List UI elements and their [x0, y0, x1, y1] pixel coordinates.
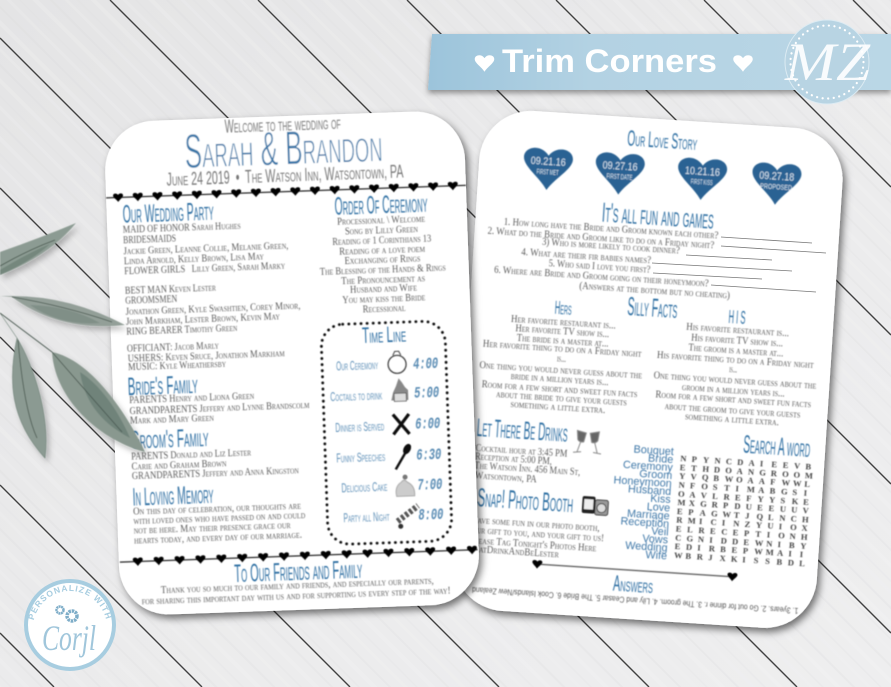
text block: order of ceremony: Exchanging of Rings — [344, 253, 421, 267]
word list: Wedding — [625, 540, 668, 554]
text block: order of ceremony: The Pronouncement as — [341, 273, 425, 287]
row: dinner — [335, 413, 441, 437]
text block: thank you: for sharing this important day with us and for supporting us every step of the way! — [142, 586, 451, 607]
text block: wedding party: Linda Arnold, Kelly Brown, Lisa May — [124, 251, 264, 267]
word list: Veil — [651, 525, 669, 538]
heart: first kiss: FIRST KISS — [690, 177, 713, 187]
icon: phone and camera — [582, 496, 609, 516]
text block: wedding party: BEST MAN Keven Lester — [125, 283, 216, 297]
text block: his facts: Room for a few short and sweet fun facts — [655, 389, 812, 410]
text block: in loving memory: On this day of celebration, our thoughts are — [133, 501, 301, 518]
word list: Vows — [642, 533, 669, 546]
panel: back of program (right card): Silly Facts — [627, 291, 678, 324]
text block: wedding party — [123, 219, 303, 373]
word search grid: ETHDOANGROOM — [679, 462, 813, 481]
text block: wedding party: John Markham, Lester Brown, Kevin May — [126, 311, 280, 328]
text block: hers facts — [477, 312, 646, 418]
leaf: lower right — [0, 313, 145, 452]
word list: Bride — [648, 453, 674, 466]
upside-down answers: 1. 3years. 2. Go out for dinne r. 3. The groom. 4. Lily and Ceasar 5. The Bride 6. Cook Islands/New Zealand — [472, 585, 799, 615]
word list: Ceremony — [623, 459, 674, 474]
word search grid: NFOSTIMABGSI — [678, 480, 808, 498]
text block: thank you: Thank you so much to our family and friends, and especially our parents, — [161, 576, 434, 596]
panel: back of program (right card): Oh Snap! Photo Booth — [459, 481, 574, 518]
row: cocktails: 5:00 — [414, 384, 440, 403]
text block: wedding party: GROOMSMEN — [125, 294, 177, 307]
panel: back of program (right card): Let There Be Drinks — [476, 414, 569, 448]
panel: time line — [321, 320, 452, 545]
text block: his facts: is... — [729, 364, 738, 376]
panel: back of program (right card) — [450, 108, 846, 631]
row: cake: Delicious Cake — [341, 479, 388, 495]
panel: front of program (left card): Groom's Family — [130, 424, 209, 455]
word list: Marriage — [627, 508, 670, 522]
text block: bride's family — [129, 389, 311, 427]
text block: his facts: groom in a million years is... — [682, 382, 785, 400]
panel: back of program (right card): H I S — [728, 307, 746, 328]
text block: wedding party: USHERS: Keven Sruce, Jonathon Markham — [128, 348, 286, 365]
word search grid: OAVLREFYYSKE — [678, 488, 810, 507]
text block: photo booth details: Please Tag Tonight's Photos Here — [469, 535, 597, 554]
leaf: lower left — [0, 313, 46, 458]
heart: first met: 09.21.16 — [530, 155, 566, 169]
title: couple names: Sarah & Brandon — [184, 119, 383, 179]
text block: in loving memory: with loved ones who have passed on and could — [133, 510, 306, 527]
heart: proposed — [750, 162, 802, 206]
word search grid: MXGRPDUEEUUV — [677, 497, 810, 516]
word list: Honeymoon — [613, 475, 672, 490]
word search grid: YVQBWOAAFWWL — [679, 471, 811, 489]
row: dinner: 6:00 — [415, 415, 441, 434]
text block: hers facts: The bride is a master at... — [516, 333, 609, 350]
row: speeches: Funny Speeches — [336, 449, 386, 466]
text block: hers facts: about the bride to give your guests — [496, 389, 627, 409]
text block: drinks details: Watsontown, PA — [474, 470, 538, 485]
heart: first date: FIRST DATE — [606, 171, 633, 182]
word list: Kiss — [650, 493, 672, 506]
leaf: middle — [0, 296, 125, 326]
icon: gears — [56, 606, 77, 621]
text block: photo booth details: Our gift to you, and your gift to us! — [470, 525, 604, 544]
text block: his facts — [651, 320, 820, 431]
word list: Groom — [639, 468, 673, 482]
text block: order of ceremony: The Blessing of the Hands & Rings — [320, 263, 446, 278]
text block: order of ceremony: Processional \ Welcome — [337, 214, 425, 228]
word list — [609, 442, 675, 563]
heart divider: bottom — [120, 546, 478, 567]
heart: first kiss — [676, 157, 728, 202]
game questions: 5. Who said I love you first? — [548, 258, 651, 276]
row: our ceremony: Our Ceremony — [336, 357, 378, 373]
text block: groom's family: PARENTS Donald and Liz Lester — [131, 447, 252, 463]
panel: front of program (left card) — [103, 109, 481, 616]
date and venue: June 24 2019 • The Watson Inn, Watsontown, PA — [166, 162, 404, 190]
text block: order of ceremony: You may kiss the Bride — [342, 292, 425, 306]
heart: first met: FIRST MET — [536, 167, 559, 177]
text block: hers facts: something a little extra. — [510, 399, 606, 416]
word search grid: NPYNCDAIEEVB — [680, 453, 812, 472]
text block: his facts: His favorite TV show is... — [691, 333, 783, 350]
game questions: 1. How long have the Bride and Groom known each other? — [503, 217, 719, 242]
game questions: (Answers at the bottom but no cheating) — [579, 281, 730, 301]
panel: back of program (right card): It's all fun and games — [601, 197, 715, 235]
panel: front of program (left card): In Loving Memory — [132, 481, 214, 512]
text block: his facts: something a little extra. — [685, 411, 779, 428]
word search grid: EDIRBEPWMAII — [674, 541, 804, 560]
word list: Bouquet — [633, 444, 674, 458]
text block: order of ceremony: Reading of a love poem — [339, 244, 426, 258]
panel: back of program (right card): Hers — [554, 298, 573, 319]
text block: wedding party: RING BEARER Timothy Green — [126, 323, 237, 338]
text block: hers facts: Her favorite TV show is... — [515, 323, 610, 340]
text block: order of ceremony: Recessional — [363, 303, 406, 315]
text block: bride's family: GRANDPARENTS Jeffery and Lynne Brandscolm — [129, 400, 310, 417]
arc text: PERSONALIZE WITH — [28, 585, 112, 620]
underlines: answer blanks — [652, 237, 826, 292]
row: our ceremony: 4:00 — [413, 355, 439, 374]
decorative leaves — [0, 223, 145, 458]
row: dinner: Dinner is Served — [335, 418, 385, 435]
banner: Trim Corners — [428, 20, 891, 104]
text block: groom's family: GRANDPARENTS Jeffery and Anna Kingston — [132, 465, 299, 482]
heart divider: top — [106, 181, 466, 202]
text block: thank you — [141, 575, 451, 607]
row: party: Party all Night — [343, 509, 390, 525]
text block: order of ceremony: Husband and Wife — [350, 283, 417, 296]
text block: groom's family — [131, 446, 299, 482]
word search grid: WBRJXKISSBDL — [674, 550, 806, 568]
panel: front of program (left card): Our Wedding Party — [122, 198, 214, 229]
heart divider — [532, 560, 738, 582]
game questions: 4. What are their fir babies names? — [521, 247, 652, 266]
text block: wedding party: MAID OF HONOR Sarah Hughes — [123, 221, 241, 236]
row: cocktails: Coctails to drink — [330, 387, 382, 404]
row: cake: 7:00 — [417, 476, 443, 495]
icon: right heart — [733, 55, 753, 72]
text block: drinks details: Reception at 5:00 PM, — [475, 451, 552, 467]
text block: hers facts: One thing you would never guess about the — [479, 360, 642, 381]
panel: front of program (left card): To Our Friends and Family — [234, 556, 363, 588]
word list: Love — [646, 501, 670, 514]
text block: drinks details: The Watson Inn. 456 Main St, — [474, 460, 581, 478]
text block: in loving memory: hearts today, and every day of our marriage. — [134, 530, 302, 547]
text block: groom's family: Carie and Graham Brown — [131, 458, 227, 473]
icon: left heart — [475, 55, 494, 72]
text block: his facts: The groom is a master at... — [688, 342, 784, 360]
panel: front of program (left card): Bride's Family — [127, 371, 198, 401]
text block: wedding party: OFFICIANT: Jacob Marly — [127, 341, 219, 355]
text block: photo booth details: Have some fun in our photo booth, — [471, 515, 600, 534]
panel: front of program (left card): Order Of Ceremony — [334, 190, 428, 221]
row: our ceremony — [336, 350, 439, 376]
leaf: upper — [0, 223, 76, 275]
game questions: 6. Where are Bride and Groom going on their honeymoon? — [494, 265, 710, 290]
heading: Answers: Answers — [612, 571, 654, 598]
text block: hers facts: Her favorite restaurant is... — [511, 314, 616, 332]
banner text: Trim Corners — [502, 43, 717, 79]
text block: hers facts: bride in a million years is... — [510, 371, 609, 388]
text block: bride's family: PARENTS Henry and Liona Green — [129, 391, 254, 406]
heading: Time Line: Time Line — [362, 322, 406, 348]
text block: wedding party: MUSIC: Kyle Wheathersby — [128, 359, 226, 373]
panel: back of program (right card): Our Love Story — [627, 126, 698, 155]
word search grid: CGNIDDEWNIBY — [675, 532, 807, 551]
logo word: Corjl — [42, 618, 96, 658]
text block: wedding party: BRIDESMAIDS — [123, 233, 176, 246]
text block: photo booth details — [469, 515, 605, 563]
badge: personalize with Corjl — [24, 579, 116, 671]
text block: hers facts: Her favorite thing to do on a Friday night — [482, 339, 642, 360]
text block: photo booth details: #EatDrinkAndBeLester — [469, 544, 560, 561]
row: party — [343, 505, 444, 531]
heart: first met — [522, 147, 574, 192]
text block: bride's family: Mark and Mary Green — [130, 413, 214, 427]
heart: first kiss: 10.21.16 — [685, 165, 720, 179]
text block: hers facts: is... — [557, 353, 566, 365]
text block: wedding party: FLOWER GIRLS Lilly Green, Sarah Marky — [124, 261, 285, 277]
icon: champagne glasses — [573, 430, 602, 454]
word list: Wife — [645, 549, 667, 562]
word search grid: EPAGWTJQLNCH — [677, 506, 809, 524]
text block: in loving memory: not be here. May their presence grace our — [134, 520, 291, 537]
text block: his facts: His favorite thing to do on a Friday night — [657, 350, 815, 371]
text block: drinks details — [473, 443, 582, 488]
heading: welcome: Welcome to the wedding of — [224, 113, 341, 137]
text block: order of ceremony — [318, 213, 447, 317]
game questions — [484, 216, 734, 301]
text block: wedding party: Jackie Green, Leanne Collie, Melanie Green, — [123, 241, 289, 257]
logo: MZ seal: MZ — [784, 32, 871, 92]
text block: wedding party: Jonathon Green, Kyle Swashtien, Corey Minor, — [125, 301, 301, 318]
game questions: 2. What do the Bride and Groom like to do on a Friday night? — [487, 226, 715, 251]
heart: first date: 09.27.16 — [602, 160, 638, 174]
row: cocktails — [330, 377, 440, 406]
logo: MZ seal — [784, 20, 871, 104]
text block: order of ceremony: Reading of 1 Corinthians 13 — [332, 234, 431, 248]
text block: his facts: One thing you would never guess about the — [653, 370, 817, 392]
word search grid — [674, 453, 814, 569]
text block: his facts: about the groom to give your guests — [664, 401, 801, 421]
game questions: 3) Who is more likely to cook dinner? — [542, 237, 681, 257]
text block: drinks details: Cocktail hour at 3:45 PM — [475, 443, 568, 460]
word list: Husband — [628, 484, 672, 498]
text block: hers facts: Room for a few short and sweet fun facts — [481, 379, 638, 400]
word list: Reception — [620, 515, 669, 530]
heart: proposed: 09.27.18 — [759, 170, 795, 184]
text block: his facts: His favorite restaurant is... — [686, 322, 789, 340]
text block: order of ceremony: Song by Lilly Green — [345, 224, 418, 238]
row: speeches — [336, 441, 442, 472]
text block: in loving memory — [133, 501, 306, 547]
word search grid: RMICINZYUIOX — [676, 515, 809, 533]
word search grid: ELRECEPTIONH — [676, 524, 808, 542]
heart: first date — [594, 152, 645, 196]
row: party: 8:00 — [418, 506, 444, 525]
heart: proposed: PROPOSED — [760, 181, 793, 192]
row: cake — [341, 473, 443, 498]
row: speeches: 6:30 — [416, 446, 442, 465]
